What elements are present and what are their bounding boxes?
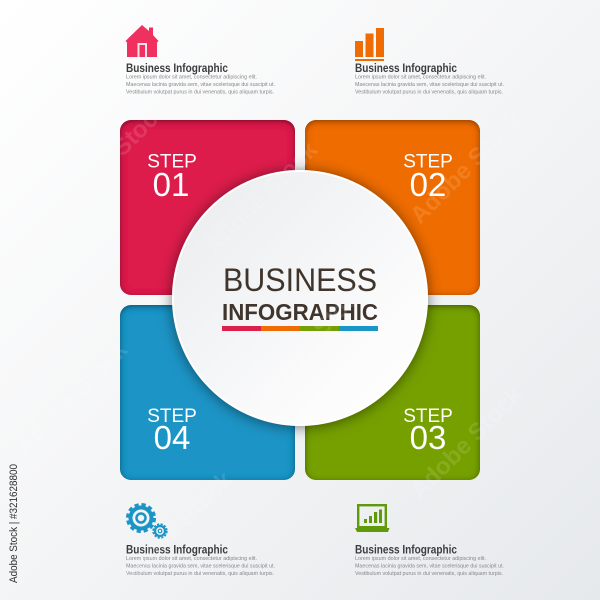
watermark: Adobe Stock: [115, 466, 238, 589]
step 02 label: [403, 152, 453, 203]
watermark: Adobe Stock: [405, 106, 528, 229]
step 04 label: [147, 406, 197, 456]
text block: bottom left: Maecenas lacinia gravida sem, vitae scelerisque dui suscipit ut.: [126, 564, 275, 570]
vertical credit: Adobe Stock | #321628800: [8, 464, 20, 583]
center circle: [173, 171, 427, 425]
center title: BUSINESS: [223, 262, 377, 298]
text block: top right: Vestibulum volutpat purus in dui venenatis, quis aliquam turpis.: [355, 90, 503, 96]
color bar: [222, 326, 378, 331]
text block: bottom right: Lorem ipsum dolor sit amet, consectetur adipiscing elit.: [355, 556, 486, 562]
icon: laptop chart: [355, 505, 390, 532]
text block: top right: Business Infographic: [355, 63, 458, 75]
text block: top right: [355, 63, 504, 96]
text block: top right: Lorem ipsum dolor sit amet, consectetur adipiscing elit.: [355, 74, 486, 80]
watermark: Adobe Stock: [50, 96, 173, 219]
step 01 label: [147, 152, 197, 203]
center title: [222, 262, 378, 325]
text block: top left: Business Infographic: [126, 63, 229, 75]
step 04 label: STEP: [147, 406, 197, 427]
watermark: Adobe Stock: [10, 336, 133, 459]
icon: bar chart: [355, 28, 384, 61]
step 03 label: [403, 406, 453, 456]
panel: step 03: [305, 305, 480, 480]
icon: gears: [128, 504, 167, 538]
text block: top right: Maecenas lacinia gravida sem, vitae scelerisque dui suscipit ut.: [355, 82, 504, 88]
text block: bottom left: Business Infographic: [126, 544, 229, 556]
watermark: Adobe Stock: [200, 136, 323, 259]
icon: house: [126, 25, 158, 57]
watermark: Adobe Stock: [405, 381, 528, 504]
step 01 label: 01: [153, 166, 189, 203]
step 02 label: STEP: [403, 152, 453, 172]
text block: bottom left: Vestibulum volutpat purus in dui venenatis, quis aliquam turpis.: [126, 571, 274, 577]
text block: bottom right: Business Infographic: [355, 544, 458, 556]
step 03 label: 03: [410, 419, 446, 456]
step 04 label: 04: [154, 419, 190, 456]
text block: top left: Vestibulum volutpat purus in dui venenatis, quis aliquam turpis.: [126, 90, 274, 96]
text block: bottom right: [355, 544, 504, 577]
step 03 label: STEP: [403, 406, 453, 427]
panel: step 01: [120, 120, 295, 295]
step 02 label: 02: [410, 166, 446, 203]
watermark: Adobe Stock: [250, 276, 373, 399]
text block: bottom left: Lorem ipsum dolor sit amet, consectetur adipiscing elit.: [126, 556, 257, 562]
text block: top left: Lorem ipsum dolor sit amet, consectetur adipiscing elit.: [126, 74, 257, 80]
panel: step 02: [305, 120, 480, 295]
step 01 label: STEP: [147, 152, 197, 172]
text block: bottom left: [126, 544, 275, 577]
panel: step 04: [120, 305, 295, 480]
text block: bottom right: Maecenas lacinia gravida sem, vitae scelerisque dui suscipit ut.: [355, 564, 504, 570]
text block: top left: [126, 63, 275, 96]
text block: bottom right: Vestibulum volutpat purus in dui venenatis, quis aliquam turpis.: [355, 571, 503, 577]
center title: INFOGRAPHIC: [222, 299, 378, 325]
text block: top left: Maecenas lacinia gravida sem, vitae scelerisque dui suscipit ut.: [126, 82, 275, 88]
